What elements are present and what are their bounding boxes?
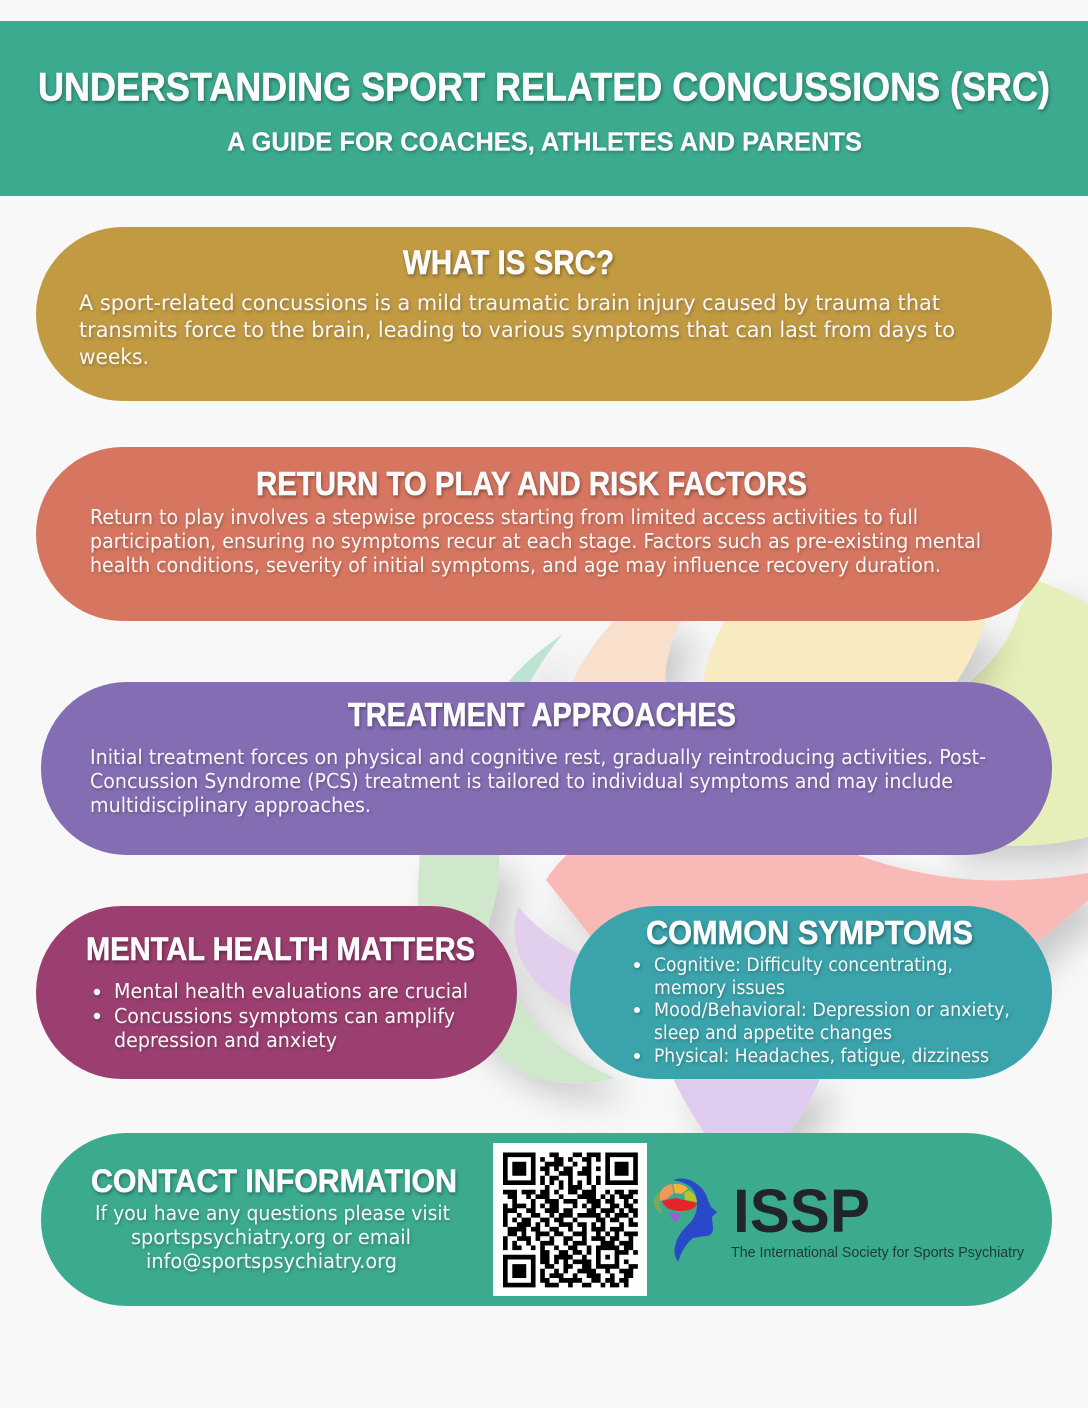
body text: transmits force to the brain, leading to various symptoms that can last from days to [79,318,955,342]
ISSP logo wordmark [731,1177,1025,1261]
heading: MENTAL HEALTH MATTERS [86,931,475,967]
lime shape [940,580,1088,846]
bullet list: Physical: Headaches, fatigue, dizziness [654,1046,989,1067]
light green shape [418,852,615,1083]
contact text: info@sportspsychiatry.org [146,1249,397,1273]
bullet list [94,979,468,1052]
peach shape [571,620,682,684]
body text: Return to play involves a stepwise process starting from limited access activities to full [90,505,918,529]
body text: health conditions, severity of initial symptoms, and age may influence recovery duration. [90,553,941,577]
heading: TREATMENT APPROACHES [348,696,736,733]
lower purple shape [672,1076,821,1136]
contact text [95,1201,450,1273]
panel: what is SRC [36,227,1052,401]
heading: COMMON SYMPTOMS [646,914,973,951]
pink shape [546,853,1088,1000]
body text [79,291,955,369]
panel: treatment approaches [41,682,1052,855]
yellow shape [703,620,986,684]
bullet list: memory issues [654,978,785,999]
bullet list [634,955,1010,1067]
bullet list: sleep and appetite changes [654,1023,892,1044]
bullet list: Cognitive: Difficulty concentrating, [654,955,953,976]
panel: return to play and risk factors [36,447,1052,621]
bullet list: Mental health evaluations are crucial [114,979,468,1003]
header banner [0,21,1088,196]
subtitle: A GUIDE FOR COACHES, ATHLETES AND PARENTS [227,126,862,156]
teal sliver shape [507,634,563,684]
lavender shape [514,906,590,1010]
body text [90,505,981,577]
body text: Concussion Syndrome (PCS) treatment is tailored to individual symptoms and may include [90,769,953,793]
logo tagline: The International Society for Sports Psychiatry [731,1245,1025,1261]
bullet list: depression and anxiety [114,1028,337,1052]
heading: RETURN TO PLAY AND RISK FACTORS [256,465,807,502]
heading: WHAT IS SRC? [403,244,614,282]
panel: common symptoms [570,906,1052,1079]
bullet list: Concussions symptoms can amplify [114,1004,455,1028]
background watermark: brain logo shapes [418,580,1088,1136]
contact text: If you have any questions please visit [95,1201,450,1225]
panel: contact information [41,1133,1052,1306]
bullet list: Mood/Behavioral: Depression or anxiety, [654,1000,1010,1021]
panel: mental health matters [36,906,517,1079]
icon: ISSP head and brain logo [654,1178,717,1262]
QR code [493,1143,647,1296]
body text: weeks. [79,345,149,369]
body text: participation, ensuring no symptoms recur at each stage. Factors such as pre-existing mental [90,529,981,553]
ISSP logo wordmark: ISSP [733,1177,870,1245]
heading: CONTACT INFORMATION [91,1163,457,1199]
contact text: sportspsychiatry.org or email [131,1225,411,1249]
body text: A sport-related concussions is a mild traumatic brain injury caused by trauma that [79,291,940,315]
body text [90,745,986,817]
body text: Initial treatment forces on physical and cognitive rest, gradually reintroducing activities. Post- [90,745,986,769]
body text: multidisciplinary approaches. [90,793,371,817]
